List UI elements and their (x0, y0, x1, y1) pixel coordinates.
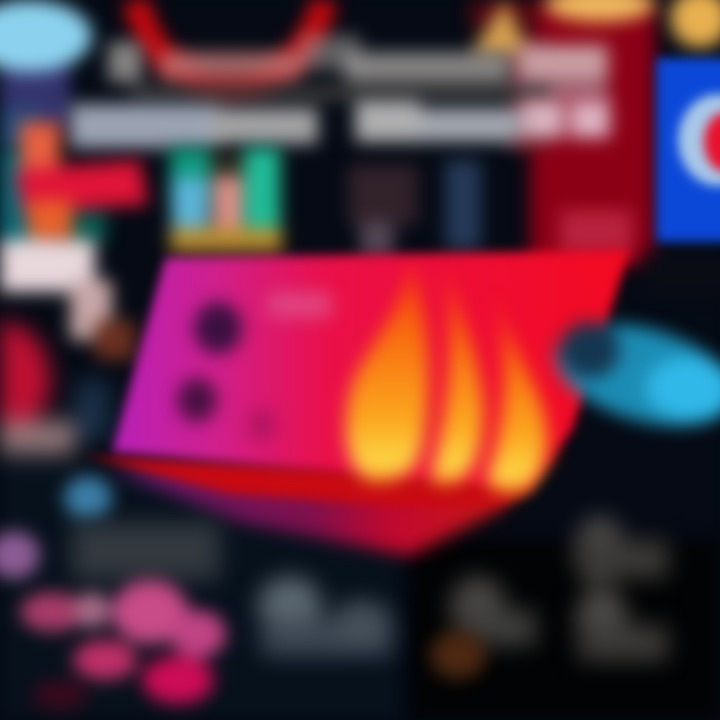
panel: dark shape right of laptop (645, 250, 720, 298)
text block: grey caption centre (258, 576, 392, 656)
panel: dark red right column (470, 0, 655, 265)
icon: red ring lower left (0, 320, 110, 455)
icon: gold trophy shapes top right (470, 0, 720, 55)
laptop top surface (112, 250, 630, 490)
icon: light blue dome top left (0, 0, 92, 150)
laptop lower lip (110, 450, 560, 556)
icon: flames (346, 262, 547, 493)
blue dot under laptop (64, 476, 112, 520)
icon: red arc top centre (135, 0, 325, 85)
text block: grey caption lower middle (450, 576, 536, 646)
text block: grey caption lower right (576, 586, 668, 661)
icon: red figure on left (0, 122, 148, 360)
icon: orange glow (430, 631, 486, 679)
text block: pink side label (0, 531, 40, 579)
panel: laptop base in magenta and red (64, 250, 630, 556)
icon: blue blob on right (544, 305, 720, 445)
text block: grey caption (72, 522, 220, 580)
text block: grey caption upper right (574, 516, 668, 588)
text block: pink highlighted lines (20, 580, 226, 711)
heading line 1 (108, 35, 608, 102)
heading: blurred title lines (108, 35, 608, 102)
dark ports (177, 292, 332, 441)
panel: colourful tile with green bars (170, 148, 282, 252)
heading line 2 (70, 100, 610, 148)
panel: blue screen top right (656, 58, 720, 243)
laptop front edge (85, 456, 535, 506)
panel: dark blurred text columns (348, 160, 632, 256)
